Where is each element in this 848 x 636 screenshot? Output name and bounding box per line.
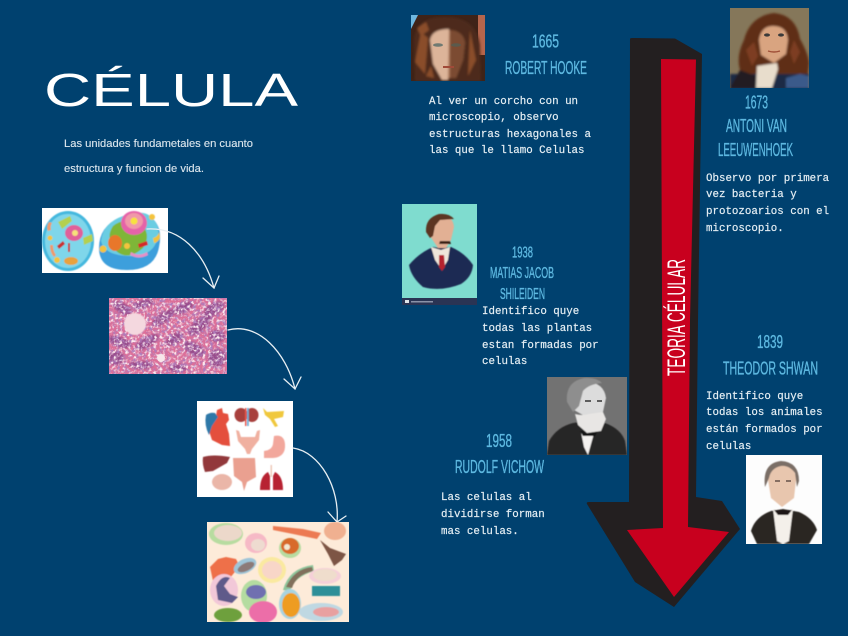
description: vez bacteria y [706,189,797,201]
subtitle text: Las unidades fundametales en cuanto [64,138,253,150]
icon: liver [203,456,230,472]
arrow shadow shape [587,38,740,607]
year: 1938 [512,244,533,262]
icon: intestines [233,458,256,491]
arrow label: TEORIA CÉLULAR [662,259,691,376]
timeline arrow [587,38,740,607]
description: están formados por [706,424,823,436]
description: Observo por primera [706,173,830,185]
icon: stomach [264,436,285,458]
description: celulas [706,441,751,453]
arrow: organ to organism [293,448,346,522]
image: organisms collage [207,522,349,623]
description: Identifico quye [482,306,579,318]
year: 1673 [745,92,768,112]
portrait: Rudolf Virchow [547,377,627,455]
description: todas los animales [706,407,823,419]
name [490,265,554,303]
description: mas celulas. [441,526,519,538]
icon: bladder [236,430,260,454]
description: protozoarios con el [706,206,829,218]
description: todas las plantas [482,323,592,335]
subtitle text [64,138,253,175]
image: tissue micrograph [107,297,227,374]
entry: Antoni van Leeuwenhoek [706,8,836,235]
entry: Matias Jacob Schleiden [402,204,605,368]
year: 1958 [486,431,512,451]
icon: heart [205,408,230,446]
entry: Theodor Schwann [706,332,829,544]
description: estructuras hexagonales a [429,129,592,141]
name: RUDOLF VICHOW [455,457,544,477]
entry: Robert Hooke [411,15,597,157]
description: celulas [482,356,527,368]
year: 1839 [757,332,783,352]
portrait: Antoni van Leeuwenhoek [730,8,809,90]
name: ANTONI VAN [726,116,787,136]
description: microscopio, observo [429,112,559,124]
portrait: Matias Jacob Schleiden [402,204,477,305]
icon: pancreas [263,408,284,427]
description: dividirse forman [441,509,545,521]
name [718,116,793,160]
description: Identifico quye [706,391,803,403]
image: organs [197,401,293,497]
name: SHILEIDEN [500,286,545,303]
arrow: cell to tissue [147,229,219,288]
portrait: Robert Hooke [411,15,485,81]
arrow: tissue to organ [228,329,301,389]
description: Las celulas al [441,492,532,504]
name: MATIAS JACOB [490,265,554,282]
entry: Rudolf Virchow [441,377,627,538]
year: 1665 [532,32,559,52]
title: CÉLULA [44,64,298,116]
icon: brain [212,474,232,490]
name: ROBERT HOOKE [505,58,587,78]
image: animal and plant cells [42,208,168,273]
subtitle text: estructura y funcion de vida. [64,163,204,175]
icon: lungs [260,465,283,490]
portrait: Theodor Schwann [746,455,822,544]
description: estan formadas por [482,340,599,352]
description: las que le llamo Celulas [429,145,585,157]
arrow red shape [627,59,729,597]
description: microscopio. [706,223,784,235]
description: Al ver un corcho con un [429,96,578,108]
icon: kidneys [234,408,258,426]
